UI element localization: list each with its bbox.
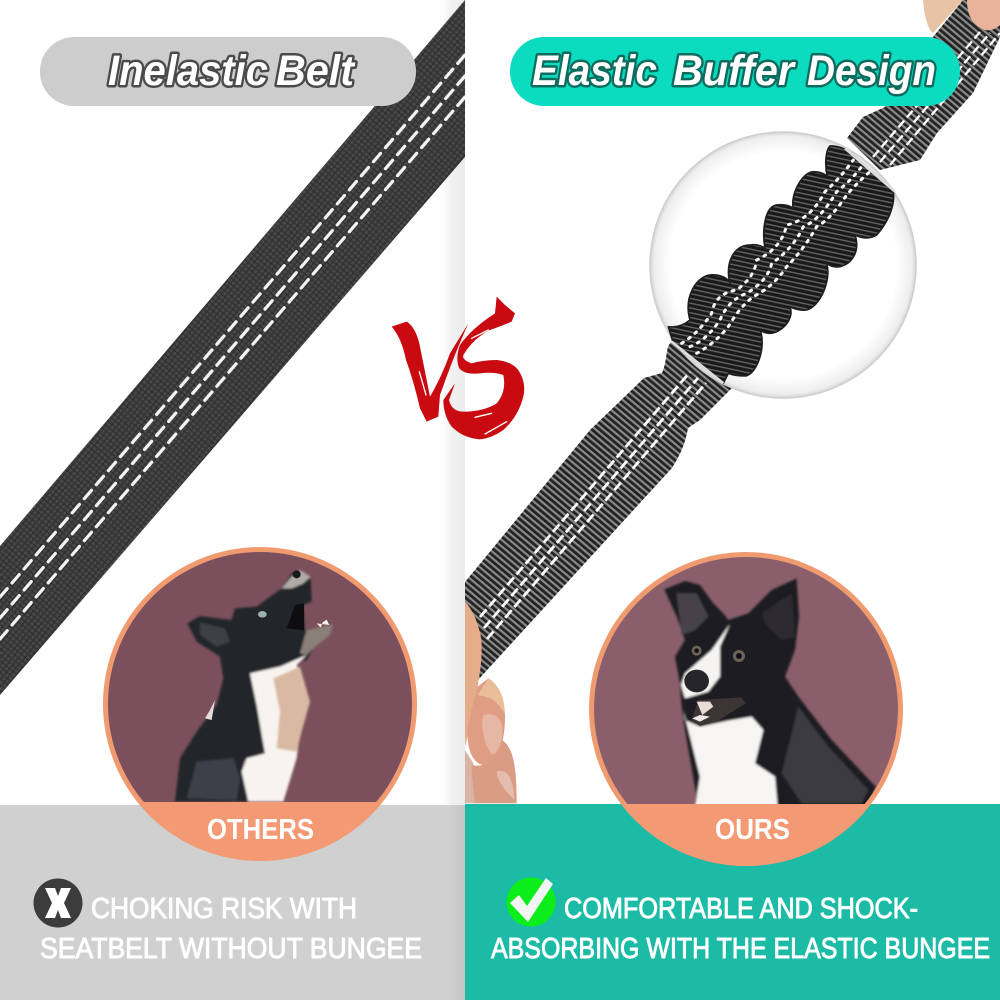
dog photo: others [100, 545, 420, 861]
heading: Inelastic Belt [108, 47, 356, 95]
caption: others: CHOKING RISK WITH [91, 893, 357, 925]
VS mark [392, 297, 524, 439]
heading: Inelastic Belt: Inelastic [108, 47, 268, 95]
bunched elastic bungee [668, 146, 895, 383]
label: others [138, 802, 382, 861]
dog: calm head tilt [664, 578, 876, 807]
heading: Inelastic Belt: Belt [276, 47, 356, 95]
panel: left background [0, 0, 465, 805]
heading: Elastic Buffer Design: Design [807, 47, 936, 95]
heading: Elastic Buffer Design: Buffer [673, 47, 796, 95]
icon: cross [34, 878, 82, 928]
dog: barking upward [175, 570, 333, 802]
caption: ours: COMFORTABLE AND SHOCK- [564, 893, 918, 925]
label: ours: OURS [715, 814, 790, 846]
dog photo: ours [585, 550, 905, 866]
hand holding lower strap [465, 602, 517, 803]
panel: left caption background [0, 805, 465, 1000]
right heading pill [510, 37, 960, 106]
caption: others: SEATBELT WITHOUT BUNGEE [40, 933, 422, 965]
label: others: OTHERS [207, 814, 314, 846]
heading: Elastic Buffer Design [532, 47, 936, 95]
elastic belt upper strap [847, 0, 1000, 170]
magnifier circle with bunched bungee [650, 132, 916, 398]
heading: Elastic Buffer Design: Elastic [532, 47, 657, 95]
panel: right background [465, 0, 1000, 805]
label: ours [621, 804, 871, 866]
left heading pill [40, 37, 416, 106]
caption: others [40, 893, 422, 965]
inelastic belt strap [0, 0, 465, 695]
icon: check mark [506, 878, 556, 926]
caption: ours [491, 893, 990, 965]
panel: right caption background [465, 804, 1000, 1000]
fingers at top right [923, 0, 1000, 33]
elastic belt lower strap [465, 342, 735, 680]
